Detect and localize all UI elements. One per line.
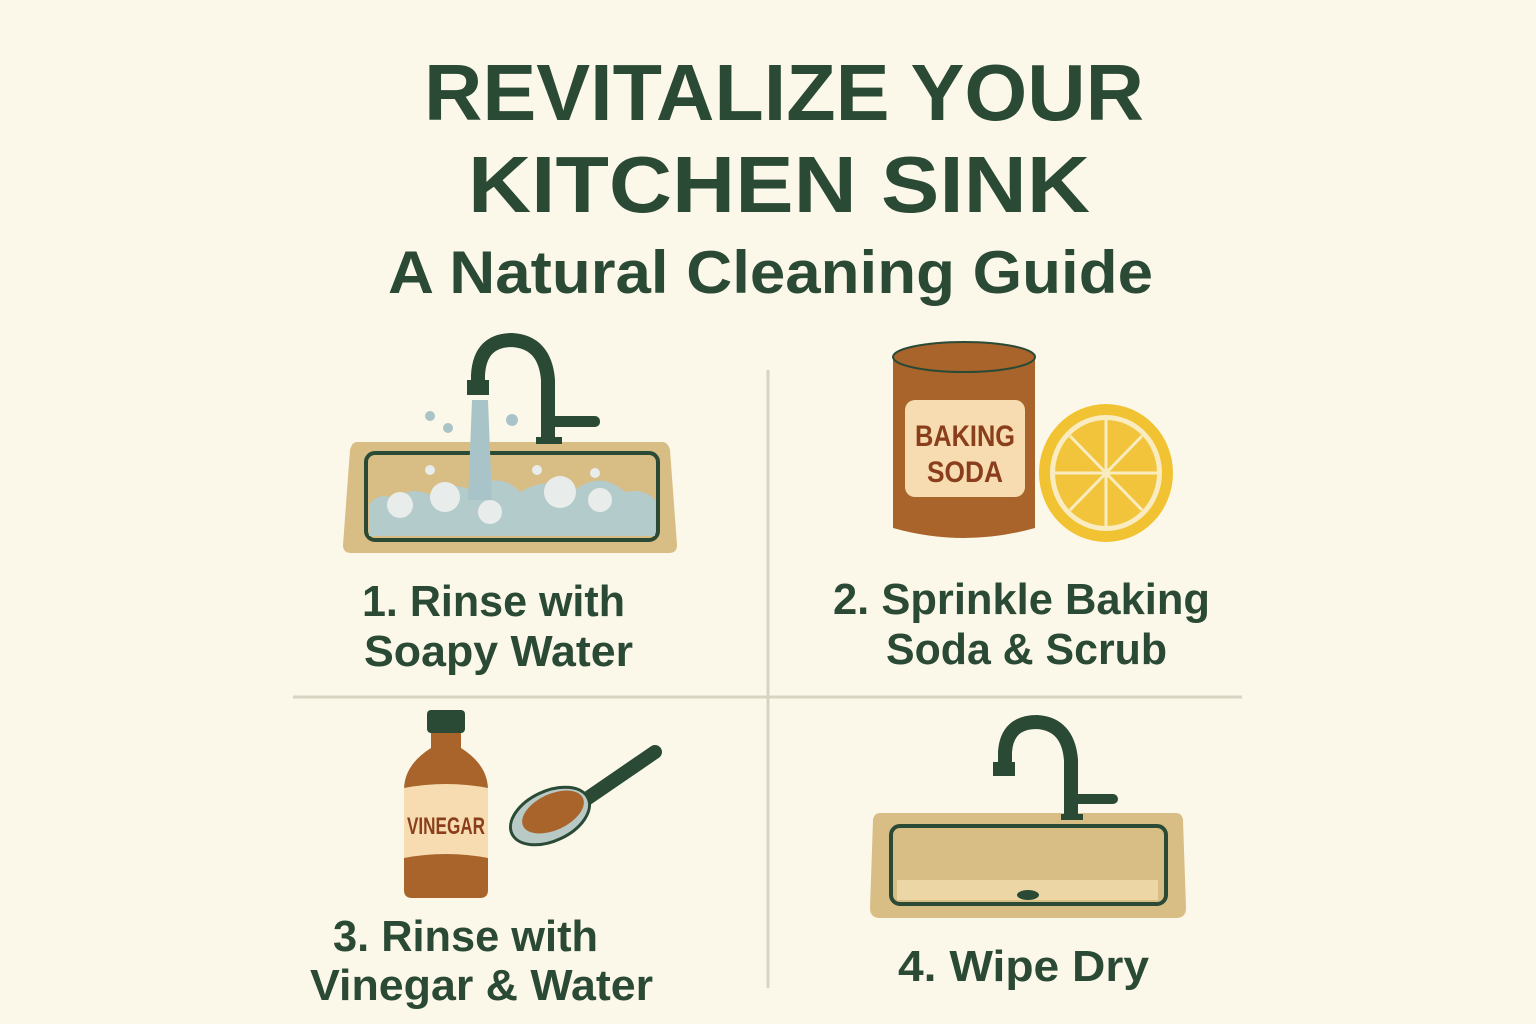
step 1 label: Soapy Water (364, 627, 633, 676)
step 1 label (362, 577, 633, 676)
step 4 label: 4. Wipe Dry (898, 942, 1150, 991)
step 3 label (310, 912, 653, 1010)
icon: clean sink (870, 722, 1186, 918)
step 2 label (833, 575, 1210, 674)
icon: vinegar bottle (404, 710, 488, 898)
icon: lemon half (1039, 404, 1173, 542)
icon: spoon (501, 752, 655, 856)
step 2 label: 2. Sprinkle Baking (833, 575, 1210, 624)
title: REVITALIZE YOUR (424, 48, 1144, 137)
icon: baking soda can (893, 342, 1035, 538)
icon: vinegar bottle: VINEGAR (407, 813, 485, 840)
subtitle: A Natural Cleaning Guide (388, 239, 1153, 306)
icon: baking soda can: BAKING (915, 420, 1015, 453)
panel: step 2 (833, 342, 1210, 674)
panel: step 4 (870, 722, 1186, 991)
icon: baking soda can: SODA (927, 456, 1003, 489)
icon: sink with soapy water (343, 340, 677, 553)
title: KITCHEN SINK (468, 140, 1090, 229)
step 3 label: Vinegar & Water (310, 961, 653, 1010)
step 1 label: 1. Rinse with (362, 577, 625, 626)
step 3 label: 3. Rinse with (333, 912, 598, 961)
panel: step 1 (343, 340, 677, 676)
title (424, 48, 1144, 229)
step 2 label: Soda & Scrub (886, 625, 1167, 674)
panel: step 3 (310, 710, 655, 1010)
